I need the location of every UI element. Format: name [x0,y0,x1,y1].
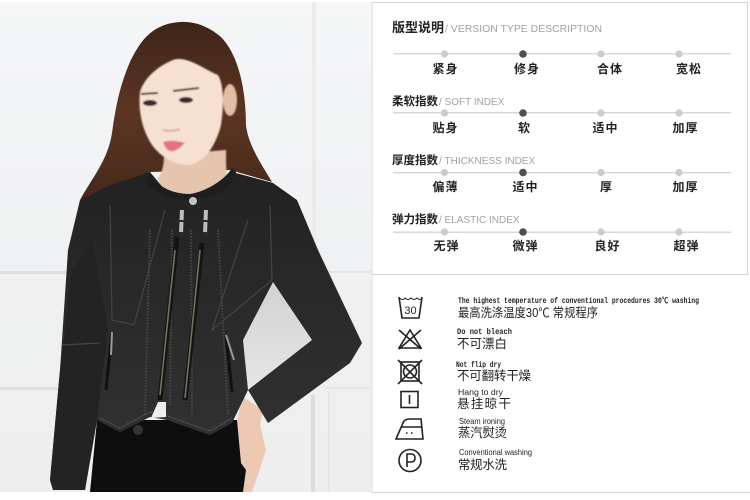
icon: steam iron [396,419,423,439]
section: soft index: 贴身 [432,120,459,135]
section: elastic index: 良好 [594,238,621,253]
care text: conventional washing: Conventional washing [459,448,532,457]
section: thickness index: 偏薄 [432,179,459,194]
panel frame [372,274,750,492]
jeans button [133,425,143,435]
section: version type: 紧身 [432,61,459,76]
care text: hang to dry [457,388,511,411]
hand [237,397,266,492]
section: soft index: 适中 [592,120,619,135]
panel frame [372,2,748,274]
section: thickness index: 厚 [600,180,613,194]
care text: hang to dry: Hang to dry [458,388,503,397]
section: elastic index: 无弹 [433,238,460,253]
photo background wall [0,2,371,492]
icon: no tumble dry [398,360,422,384]
care text: no tumble dry: Not flip dry [456,361,501,370]
icon: wash at 30 degrees [399,297,422,318]
section: elastic index [392,212,731,253]
section: soft index: 软 [518,120,531,135]
care text: no tumble dry: 不可翻转干燥 [457,368,531,383]
section: elastic index: 超弹 [673,238,700,253]
care text: steam ironing: 蒸汽熨烫 [458,425,507,440]
care text: steam ironing [458,417,507,440]
care text: no tumble dry [456,361,531,383]
white shirt hem [151,402,166,418]
section: soft index: 柔软指数/ SOFT INDEX [392,94,505,108]
section: version type: 版型说明 [392,20,444,35]
section: thickness index: 加厚 [672,180,699,194]
section: version type: 宽松 [676,61,702,76]
section: version type: / VERSION TYPE DESCRIPTION [445,24,602,35]
section: thickness index: 厚度指数/ THICKNESS INDEX [392,153,535,167]
care text: wash temperature: 最高洗涤温度30℃ 常规程序 [458,305,598,320]
section: elastic index: 微弹 [512,238,539,253]
photo: model wearing black leather jacket [0,2,371,492]
panel: version indices [372,2,748,274]
section: thickness index [392,153,731,194]
care text: do not bleach: 不可漂白 [457,336,507,351]
care text: hang to dry: 悬挂晾干 [457,396,511,411]
care text: wash temperature [458,296,699,320]
section: version type [392,20,731,76]
section: elastic index: 弹力指数/ ELASTIC INDEX [392,212,520,226]
section: thickness index: 适中 [512,179,539,194]
section: version type: 修身 [514,61,540,76]
icon: hang to dry [401,392,418,408]
care text: conventional washing: 常规水洗 [458,457,507,472]
care text: conventional washing [458,448,532,472]
zippers [106,197,234,400]
section: soft index: 加厚 [672,121,699,135]
pants [90,420,250,492]
icon: do not bleach [399,330,421,349]
care text: wash temperature: The highest temperature of conventional procedures 30℃ washing [458,296,699,306]
panel: care instructions [372,274,750,492]
icon: dry clean P [399,450,421,472]
care text: do not bleach [457,328,512,351]
collar [145,168,236,200]
icon: wash at 30 degrees: 30 [404,305,417,317]
section: soft index [392,94,731,135]
jacket body and sleeves [50,172,362,490]
hair [80,22,272,200]
care text: steam ironing: Steam ironing [459,417,505,426]
care text: do not bleach: Do not bleach [457,328,512,337]
section: version type: 合体 [597,61,623,76]
face and neck [140,59,237,197]
